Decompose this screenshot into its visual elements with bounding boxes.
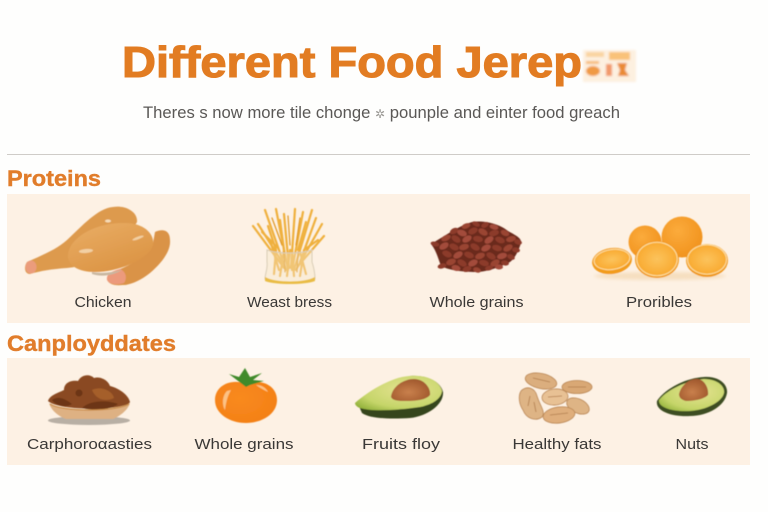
label: carphoroasties: Carphoroαasties (27, 436, 152, 453)
title: Different Food Jerep (122, 38, 582, 87)
icon: chicken (25, 207, 170, 285)
label: healthy fats: Healthy fats (512, 436, 602, 453)
label: nuts: Nuts (676, 436, 708, 453)
subtitle: Theres s now more tile chonge ✲ pounple and einter food greach (143, 104, 620, 122)
icon: beans (430, 220, 523, 274)
icon: nuts (519, 370, 592, 425)
icon: bowl of food (48, 375, 130, 425)
label: fruits floy: Fruits floy (362, 436, 441, 453)
heading: carbohydrates: Canployddates (7, 331, 176, 356)
icon: fries in jar (253, 209, 324, 284)
divider (7, 154, 750, 155)
icon: oranges (590, 216, 728, 280)
panel: proteins (7, 194, 750, 323)
icon: avocado (355, 376, 443, 418)
title smudge decoration (583, 50, 636, 82)
label: proribles: Proribles (626, 294, 692, 311)
icon: tomato (215, 368, 277, 423)
label: weast bress: Weast bress (247, 294, 332, 311)
label: whole grains: Whole grains (194, 436, 294, 453)
icon: avocado half (657, 377, 727, 416)
heading: proteins: Proteins (7, 166, 101, 191)
label: chicken: Chicken (74, 294, 132, 311)
panel: carbohydrates (7, 358, 750, 465)
label: whole grains: Whole grains (430, 294, 524, 311)
